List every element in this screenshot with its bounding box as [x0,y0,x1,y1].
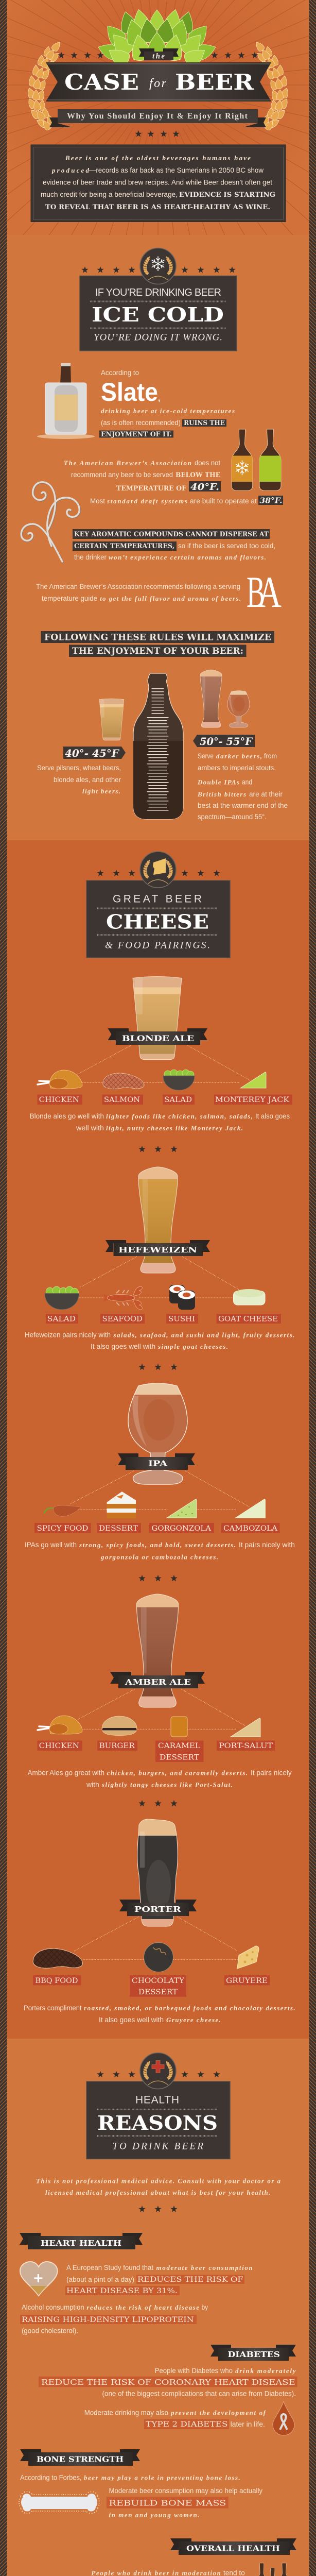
text: brewers association temperature: are built to operate at [190,497,257,505]
intro panel: TO REVEAL THAT BEER IS AS HEART-HEALTHY AS WINE. [45,204,270,211]
porter glass [137,1819,178,1926]
icon: two bottles [232,429,281,490]
icon: sushi [169,1285,195,1310]
text: brewers association temperature [64,459,283,505]
intro panel: EVIDENCE IS STARTING [179,191,275,199]
hefeweizen glass [138,1167,178,1273]
text: aromatic compounds: the drinker [74,553,107,561]
text: heart health: (good cholesterol). [22,2327,78,2334]
text: amber ale: with [86,1781,99,1788]
text: aromatic compounds: CERTAIN TEMPERATURES, [74,543,174,550]
ribbon: heart health [20,2233,143,2249]
connector lines: amber ale [78,1689,245,1729]
temperature tag 40-45: 40°- 45°F [65,747,120,759]
text: according to Slate: ENJOYMENT OF IT. [101,431,172,438]
text: darker beers: Double IPAs [197,778,239,786]
text: brewers association temperature: BELOW THE [175,471,220,479]
text: amber ale [28,1769,292,1788]
labels: hefeweizen [46,1314,281,1324]
text: porter: roasted, smoked, or barbequed foods and chocolaty desserts. [84,2004,295,2012]
labels: ipa: GORGONZOLA [151,1524,211,1533]
title banner: CASE [64,70,139,95]
ipa glass [128,1383,187,1484]
hero stars [58,52,258,58]
labels: blonde ale: MONTEREY JACK [215,1096,290,1104]
text: darker beers: best at the warmer end of the [198,802,288,809]
icon: salad [45,1286,79,1310]
ribbon: overall health: OVERALL HEALTH [186,2544,280,2553]
icon: chicken [38,1716,82,1734]
text: brewers association temperature: The American Brewer’s Association [64,459,191,467]
labels: porter: CHOCOLATY [132,1977,185,1985]
heading panel: cheese: CHEESE [106,910,209,934]
labels: hefeweizen: GOAT CHEESE [218,1315,278,1324]
icons: dark beer glasses [200,670,250,727]
stars [138,2206,178,2212]
logo: brewers association: B [247,567,265,617]
title banner: BEER [175,70,254,95]
intro panel: —records as far back as the Sumerians in 2050 BC show [89,166,264,174]
thermometer bottle [133,673,183,819]
text: heart health: REDUCES THE RISK OF [137,2276,243,2284]
text: aromatic compounds [73,529,275,561]
icon: carrot cake [107,1492,136,1518]
icon: goat cheese [234,1289,265,1305]
text: darker beers: from [264,752,277,760]
labels: blonde ale: CHICKEN [39,1096,79,1104]
icon: heart [20,2262,58,2296]
text: diabetes [39,2367,297,2429]
text: diabetes: drink moderately [235,2367,296,2375]
text: brewers association temperature: does not [195,459,220,467]
text: aromatic compounds: KEY AROMATIC COMPOUNDS CANNOT DISPERSE AT [74,531,269,538]
text: according to Slate: According to [101,369,139,377]
blonde ale glass [133,977,182,1059]
labels: porter: DESSERT [138,1988,178,1996]
decorative swirl [21,482,80,562]
ribbon: hefeweizen: HEFEWEIZEN [118,1245,197,1255]
text: ipa [25,1541,295,1561]
intro panel [31,145,286,222]
text: brewers association temperature: 40°F. [190,482,219,493]
cheese stars [97,870,220,876]
text: heart health: moderate beer consumption [156,2264,253,2272]
text: darker beers: darker beers, [216,752,262,760]
icon: chocolate truffle [144,1942,173,1972]
title banner: for [149,77,167,90]
text: serving guide [36,583,241,602]
text: blonde ale: well with [76,1124,104,1132]
hero wheat left [26,40,62,131]
labels: ipa [34,1523,280,1533]
text: heart health: by [202,2303,208,2311]
text: heart health: reduces the risk of heart disease [86,2303,199,2311]
text: bone strength: Moderate beer consumption may also help actually [109,2487,262,2495]
text: light beers: blonde ales, and other [54,776,121,784]
heading panel: health reasons [86,2081,230,2159]
text: hefeweizen: simple goat cheeses. [157,1343,228,1350]
icon: caramel [171,1717,187,1737]
labels: porter: GRUYERE [226,1977,268,1985]
labels: ipa: DESSERT [99,1524,138,1533]
text: according to Slate: Slate [101,378,158,406]
text: blonde ale [30,1112,290,1132]
text: hefeweizen [25,1331,294,1350]
temperature tag 50-55: 50°- 55°F [200,735,253,748]
icon: pint glass [99,699,124,740]
text: diabetes: REDUCE THE RISK OF CORONARY HEART DISEASE [41,2378,295,2387]
text: darker beers [197,752,288,821]
text: amber ale: It pairs nicely [251,1769,292,1777]
text: blonde ale: Blonde ales go well with [30,1112,104,1120]
intro panel: Beer is one of the oldest beverages humans have [65,154,251,162]
text: bone strength: in men and young women. [109,2511,200,2519]
text: diabetes: Moderate drinking may also [84,2409,168,2416]
heading panel: health reasons: TO DRINK BEER [112,2141,203,2152]
"the" ribbon: the [152,53,165,61]
text: according to Slate: RUINS THE [184,419,225,427]
intro panel: much credit for being a beneficial beverage, [41,191,178,198]
text: ipa: gorgonzola or cambozola cheeses. [100,1553,218,1561]
heading panel: cheese: & FOOD PAIRINGS. [105,940,210,951]
labels: hefeweizen: SUSHI [168,1315,195,1324]
text: medical disclaimer: This is not professional medical advice. Consult with your doctor or a [36,2177,280,2184]
text: diabetes: later in life. [231,2420,265,2428]
ribbon: ipa [118,1453,195,1470]
ribbon: diabetes: DIABETES [227,2350,280,2359]
text: blonde ale: It also goes [255,1112,290,1120]
text: hefeweizen: Hefeweizen pairs nicely with [25,1331,111,1339]
text: aromatic compounds: won’t experience certain aromas and flavors. [109,553,266,561]
text: heart health [20,2264,253,2334]
subtitle ribbon: Why You Should Enjoy It & Enjoy It Right [67,112,248,121]
text: diabetes: TYPE 2 DIABETES [146,2420,227,2429]
labels: amber ale: BURGER [99,1742,135,1750]
icon: monterey jack [240,1072,266,1088]
ribbon: porter [119,1900,197,1916]
text: darker beers: Serve [198,752,214,760]
text: brewers association temperature: Most [90,497,105,505]
text: darker beers: ambers to imperial stouts. [198,764,276,772]
amber ale glass [137,1594,179,1707]
ribbon: hefeweizen [106,1240,210,1256]
ribbon: diabetes [210,2345,296,2361]
text: ipa: strong, spicy foods, and bold, sweet desserts. [79,1541,236,1549]
text: brewers association temperature: 38°F. [259,497,282,505]
hero emblem: hop [96,8,218,70]
text: bone strength: According to Forbes, [20,2474,82,2481]
icon: chicken [38,1070,82,1089]
text: bone strength: beer may play a role in preventing bone loss. [84,2474,240,2481]
ribbon: heart health: HEART HEALTH [41,2239,121,2248]
icon: pepper [44,1505,81,1516]
text: porter: Porters compliment [24,2004,82,2012]
ribbon: bone strength: BONE STRENGTH [37,2455,124,2464]
connector lines: blonde ale [78,1045,250,1083]
labels: blonde ale [37,1094,292,1105]
text: amber ale: Amber Ales go great with [28,1769,104,1777]
stars [135,130,180,137]
text: porter: Gruyere cheese. [166,2016,221,2024]
labels: hefeweizen: SALAD [47,1315,76,1324]
subtitle ribbon [49,109,266,127]
text: medical disclaimer: licensed medical professional about what is best for your health. [45,2189,271,2196]
text: porter: It also goes well with [99,2016,164,2024]
ribbon: bone strength [20,2449,140,2466]
text: heart health: RAISING HIGH-DENSITY LIPOPROTEIN [22,2316,194,2324]
text: amber ale: chicken, burgers, and caramelly deserts. [107,1769,248,1777]
text: darker beers: British bitters [197,790,246,798]
text: light beers [37,764,121,795]
text: serving guide: to get the full flavor and aroma of beers. [100,595,241,602]
heading panel: ice cold: YOU’RE DOING IT WRONG. [94,332,222,343]
stars [138,1575,178,1581]
text: according to Slate: (as is often recommended) [101,419,181,427]
heading chips: rules [41,631,274,657]
connector lines: ipa [69,1471,250,1510]
stars [138,1146,178,1152]
heading panel: health reasons: HEALTH [135,2094,179,2106]
labels: ipa: SPICY FOOD [37,1524,89,1533]
labels: ipa: CAMBOZOLA [223,1524,277,1533]
text: serving guide: The American Brewer’s Association recommends following a serving [36,583,240,590]
badge: cheese [140,852,176,888]
ribbon: ipa: IPA [148,1459,167,1468]
heading chips: rules: FOLLOWING THESE RULES WILL MAXIMIZE [44,633,271,643]
text: heart health: A European Study found that [66,2264,153,2272]
stars [138,1363,178,1370]
labels: porter: BBQ FOOD [35,1977,78,1985]
text: ipa: It pairs nicely with [239,1541,295,1549]
text: amber ale: slightly tangy cheeses like Port-Salut. [101,1781,233,1788]
text: darker beers: spectrum—around 55°. [198,813,267,821]
icon: bottle in ice [37,363,95,439]
badge: snowflake [140,248,176,284]
labels: amber ale: DESSERT [160,1754,199,1762]
ribbon: overall health [170,2538,296,2555]
text: hefeweizen: It also goes well with [91,1343,155,1350]
icon: gorgonzola [167,1499,197,1518]
text: diabetes: prevent the development of [170,2409,267,2416]
heading panel: ice cold [80,276,237,351]
text: darker beers: are at their [249,790,283,798]
text: ipa: IPAs go well with [25,1541,77,1549]
"the" ribbon [139,48,179,61]
text: light beers: light beers. [82,787,120,795]
labels: hefeweizen: SEAFOOD [102,1315,143,1324]
text: darker beers: and [242,778,252,786]
heading panel: cheese: GREAT BEER [113,893,202,905]
labels: amber ale: CARAMEL [158,1742,200,1750]
text: medical disclaimer [36,2177,280,2196]
labels: amber ale: CHICKEN [39,1742,79,1750]
icon: salad [163,1070,195,1090]
text: blonde ale: light, nutty cheeses like Monterey Jack. [106,1124,243,1132]
text: heart health: Alcohol consumption [22,2303,84,2311]
text: diabetes: (one of the biggest complications that can arise from Diabetes). [102,2390,296,2398]
icon: port-salut [231,1718,260,1737]
text: bone strength [20,2474,262,2519]
text: aromatic compounds: so if the beer is served too cold, [178,542,275,550]
text: bone strength: REBUILD BONE MASS [109,2498,226,2507]
icon: burger [102,1716,137,1735]
heading panel: ice cold: IF YOU’RE DRINKING BEER [95,287,221,298]
text: heart health: HEART DISEASE BY 31%. [66,2287,178,2295]
heading panel: cheese [86,880,230,958]
text: porter [24,2004,295,2024]
text: according to Slate: drinking beer at ice-cold temperatures [101,407,235,415]
ice cold stars [81,266,236,273]
icon: blood drop with ribbon [273,2401,294,2435]
heading panel: health reasons: REASONS [97,2111,218,2134]
text: serving guide: temperature guide [42,595,97,602]
labels: amber ale: PORT-SALUT [219,1742,273,1750]
logo: brewers association: A [258,567,282,617]
icon: gruyere [237,1946,259,1969]
text: blonde ale: lighter foods like chicken, salmon, salads, [106,1112,253,1120]
connector lines: hefeweizen [79,1257,239,1298]
icon: bone [21,2494,97,2512]
icon: salmon [103,1073,144,1089]
ribbon: blonde ale: BLONDE ALE [122,1033,194,1043]
ribbon: porter: PORTER [134,1905,181,1914]
icon: seafood [103,1286,142,1310]
stars [138,1800,178,1806]
labels: porter [33,1975,270,1997]
badge: medical cross [140,2053,176,2089]
labels: amber ale [37,1740,275,1762]
ribbon: amber ale [110,1672,205,1688]
sunburst rays [7,0,309,235]
text: heart health: (about a pint of a day) [66,2276,134,2283]
icon: bbq food [33,1948,82,1968]
hero wheat right [254,40,290,131]
intro panel: evidence of beer trade and brew recipes. And while Beer doesn’t often get [43,178,272,187]
connector lines: porter [74,1917,238,1959]
text: brewers association temperature: standard draft systems [107,497,187,505]
text: hefeweizen: salads, seafood, and sushi and light, fruity desserts. [113,1331,294,1339]
ribbon: blonde ale [108,1028,207,1045]
text: overall health [47,2569,247,2576]
icon: three bottles [255,2563,291,2576]
text: according to Slate: , [158,394,160,403]
text: diabetes: People with Diabetes who [155,2367,233,2375]
heading panel: ice cold: ICE COLD [92,303,224,326]
labels: blonde ale: SALMON [104,1096,140,1104]
text: brewers association temperature: TEMPERATURE OF [116,485,187,493]
title banner [46,62,271,101]
heading chips: rules: THE ENJOYMENT OF YOUR BEER: [72,646,243,656]
intro panel: produced [51,166,90,174]
health stars [97,2071,220,2077]
labels: blonde ale: SALAD [164,1096,192,1104]
text: light beers: Serve pilsners, wheat beers, [37,764,121,772]
ribbon: amber ale: AMBER ALE [125,1677,191,1687]
text: brewers association temperature: recommend any beer to be served [71,471,173,479]
text: according to Slate [99,369,235,438]
icon: cambozola [235,1499,265,1518]
